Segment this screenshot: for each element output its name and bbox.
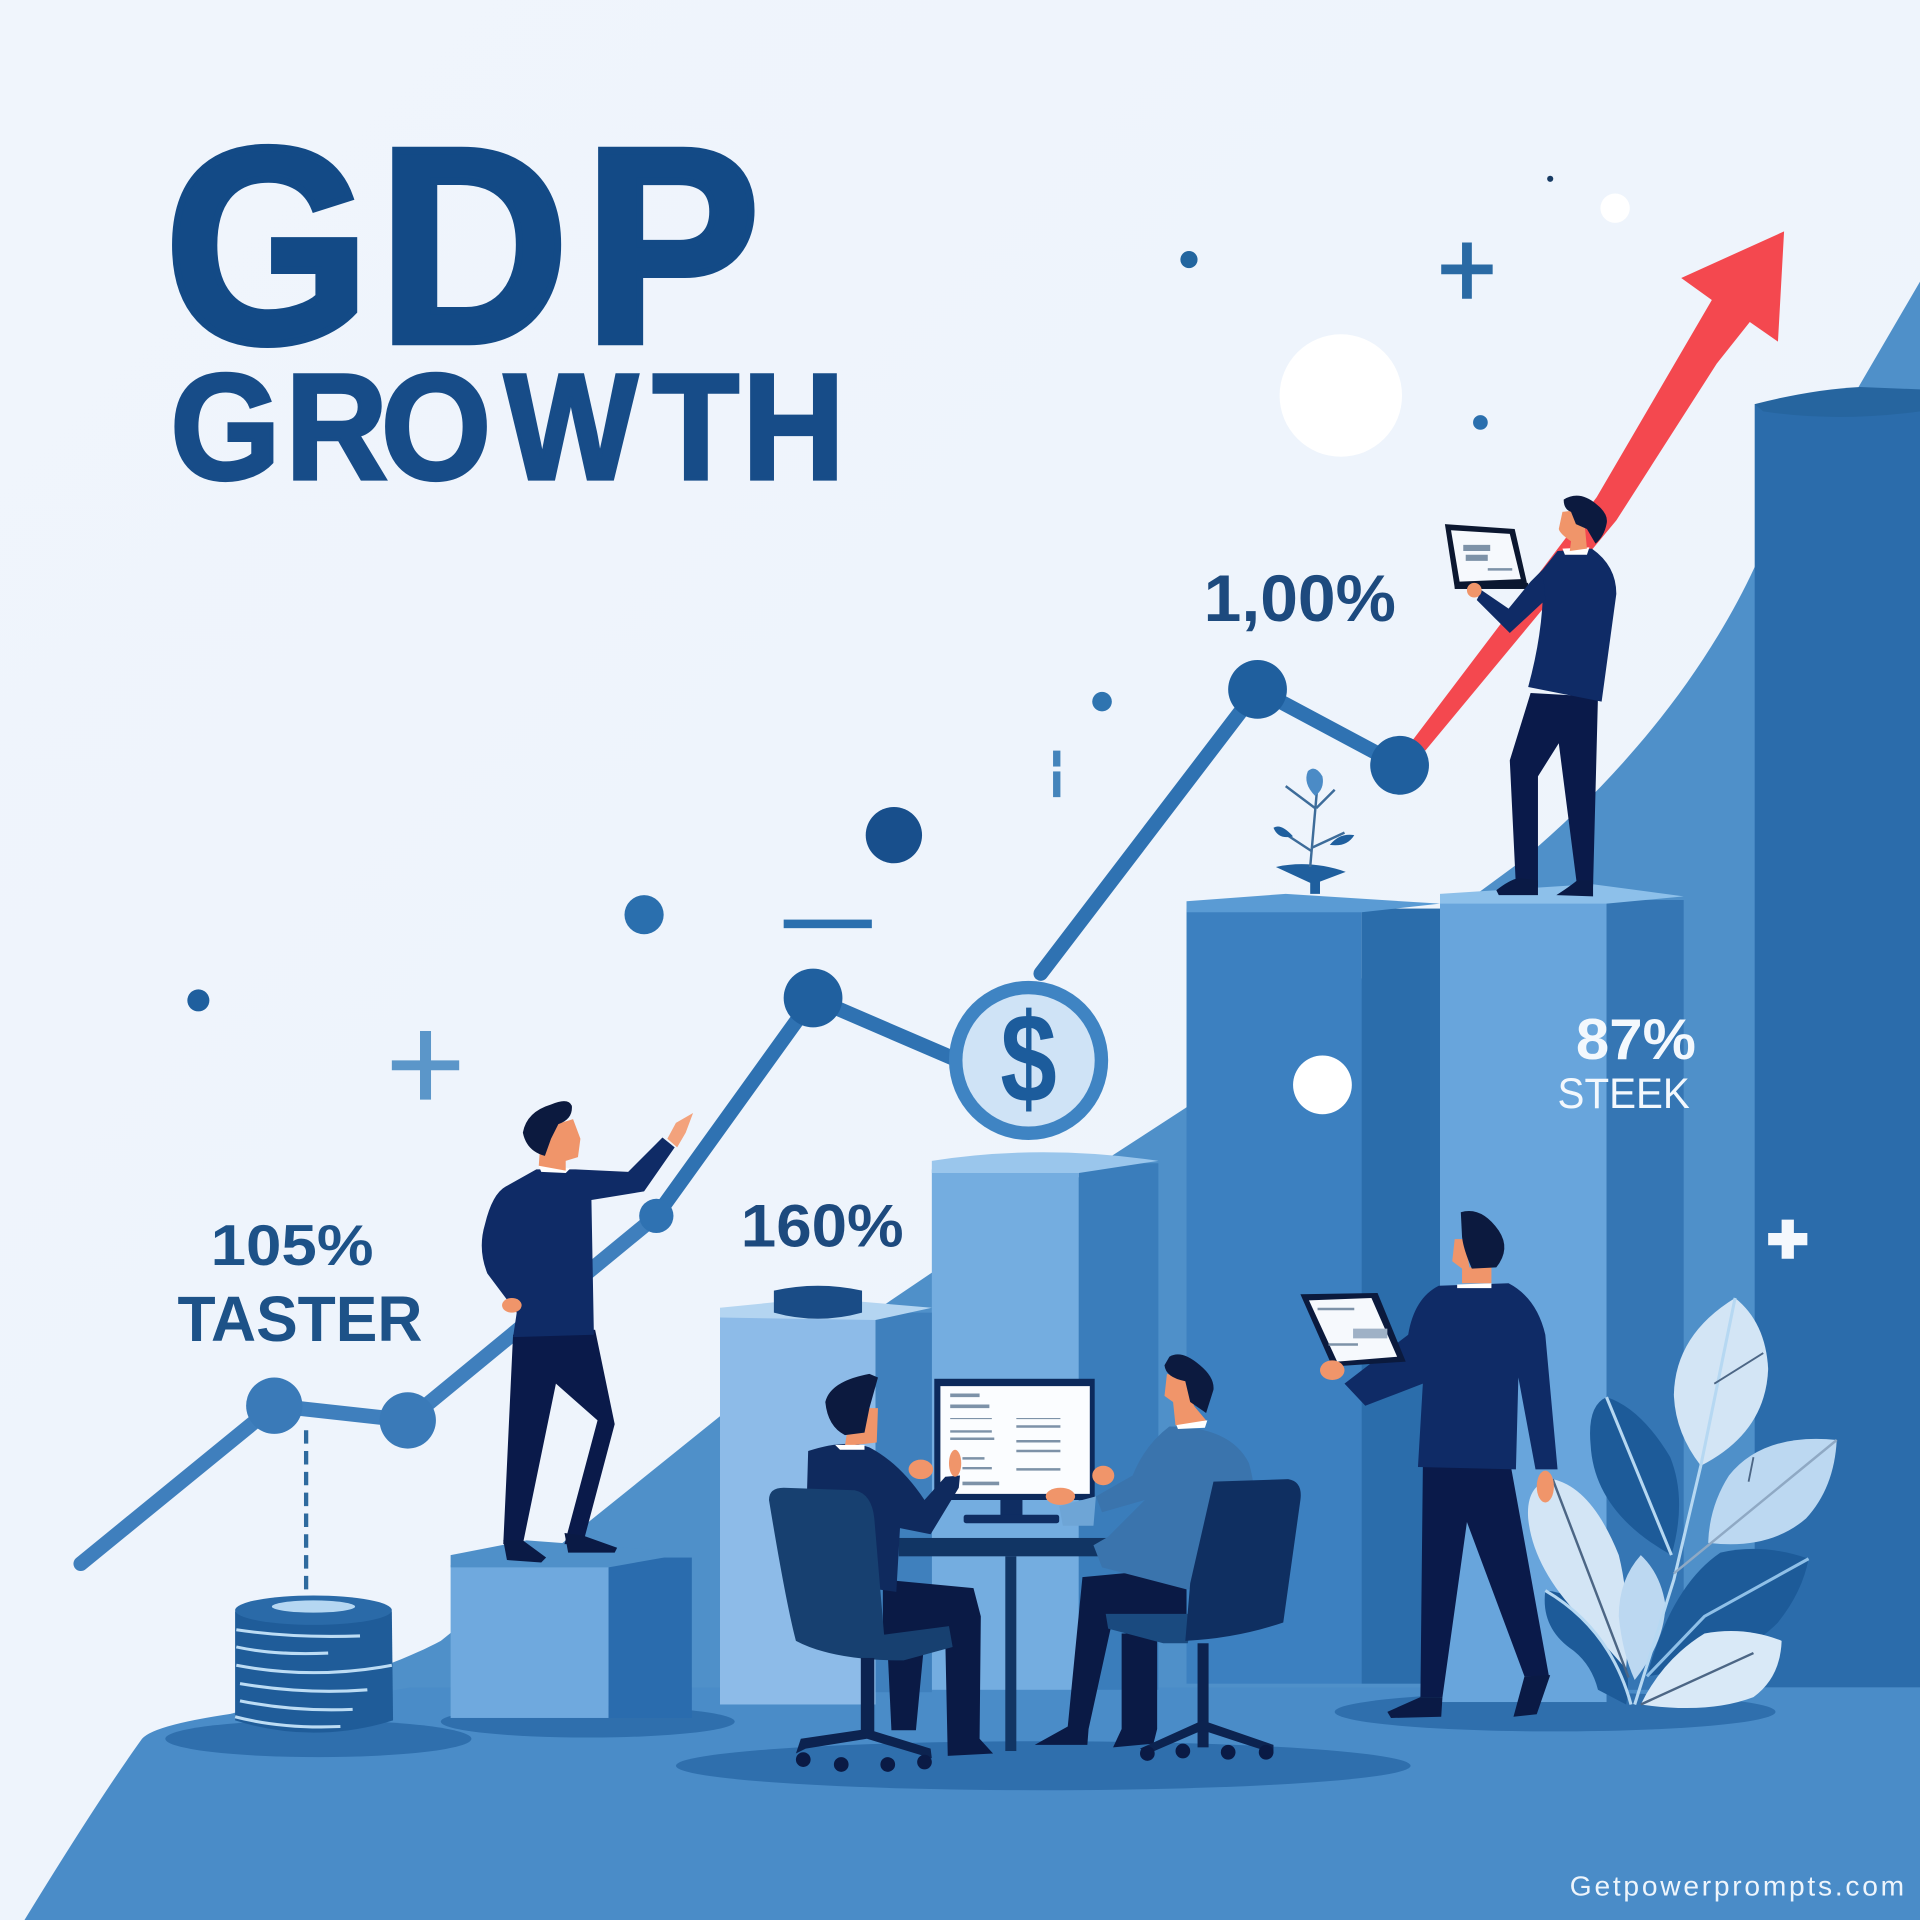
ground shadows — [165, 1692, 1776, 1790]
collar — [539, 1166, 571, 1173]
title: GDP: GDP — [165, 91, 760, 401]
collar — [1457, 1283, 1491, 1288]
jacket and arm — [482, 1138, 675, 1337]
chart node under arrow — [1370, 736, 1429, 795]
ground — [24, 1687, 1920, 1920]
light leaf right — [1708, 1439, 1837, 1544]
red arrow — [1413, 231, 1784, 751]
arm — [1477, 569, 1545, 633]
title: GROWTH: GROWTH — [170, 343, 845, 511]
shoes — [503, 1533, 617, 1562]
line chart — [81, 689, 1400, 1564]
hair — [1564, 496, 1607, 544]
small center leaf — [1619, 1555, 1665, 1680]
collar — [1562, 547, 1589, 555]
icon: coin stack — [235, 1596, 393, 1733]
bar 4 — [1187, 894, 1440, 1684]
tall bar far right — [1755, 387, 1920, 1687]
monitor — [934, 1379, 1095, 1523]
waist hand — [502, 1298, 522, 1313]
hair — [1461, 1211, 1504, 1269]
dollar coin — [949, 981, 1108, 1140]
label: 87% STEEK: 87% — [1576, 1008, 1696, 1072]
trousers — [1420, 1467, 1549, 1697]
laptop — [1445, 524, 1527, 588]
hand — [1467, 583, 1482, 598]
jacket — [1528, 549, 1616, 702]
bar 2 — [720, 1286, 932, 1704]
plant: large leaves — [1528, 1298, 1837, 1708]
hair — [523, 1101, 572, 1156]
desk scene — [769, 1354, 1301, 1772]
label: 160%: 160% — [741, 1193, 904, 1260]
dollar coin: $ — [1000, 987, 1057, 1129]
hand — [667, 1113, 693, 1147]
label: 87% STEEK: STEEK — [1558, 1070, 1690, 1118]
shoes — [1387, 1675, 1550, 1718]
bar 3 — [932, 1152, 1158, 1690]
label: 87% STEEK — [1558, 1008, 1696, 1118]
label: 105%: 105% — [211, 1214, 373, 1278]
bar 5 — [1440, 884, 1684, 1702]
icon: plant on bar — [1273, 769, 1354, 894]
decorative dots and plus signs — [187, 176, 1630, 1100]
tablet — [1300, 1293, 1406, 1367]
white plus — [1768, 1220, 1807, 1259]
table — [899, 1538, 1151, 1556]
person: right standing with tablet — [1300, 1211, 1558, 1718]
light leaf left — [1528, 1479, 1628, 1669]
face — [539, 1119, 580, 1171]
stems and veins — [1545, 1298, 1837, 1704]
person: left pointing — [482, 1101, 693, 1562]
face — [1559, 509, 1587, 551]
background mountain — [144, 282, 1920, 1745]
light leaf bottom — [1641, 1631, 1782, 1708]
light leaf top — [1674, 1298, 1768, 1466]
left seated person — [804, 1374, 993, 1756]
right chair — [1106, 1479, 1301, 1761]
label: TASTER: TASTER — [178, 1284, 422, 1355]
dark leaf lower left — [1545, 1591, 1628, 1704]
dark leaf upper left — [1590, 1397, 1679, 1555]
dark leaf lower right — [1647, 1549, 1809, 1676]
jacket — [1344, 1283, 1558, 1469]
white circle on bar 4 — [1293, 1056, 1352, 1114]
person: top with laptop — [1445, 496, 1616, 896]
dashed connector — [304, 1430, 308, 1594]
shoes — [1496, 878, 1593, 896]
left chair — [769, 1488, 953, 1772]
trousers — [1510, 693, 1598, 887]
chart nodes — [246, 660, 1287, 1449]
block 1 — [451, 1540, 692, 1718]
label: 1,00%: 1,00% — [1204, 562, 1396, 636]
face and neck — [1452, 1239, 1491, 1283]
watermark: Getpowerprompts.com — [1570, 1871, 1904, 1902]
trousers — [503, 1330, 615, 1544]
right seated person — [1035, 1354, 1257, 1747]
hands — [1320, 1360, 1344, 1380]
